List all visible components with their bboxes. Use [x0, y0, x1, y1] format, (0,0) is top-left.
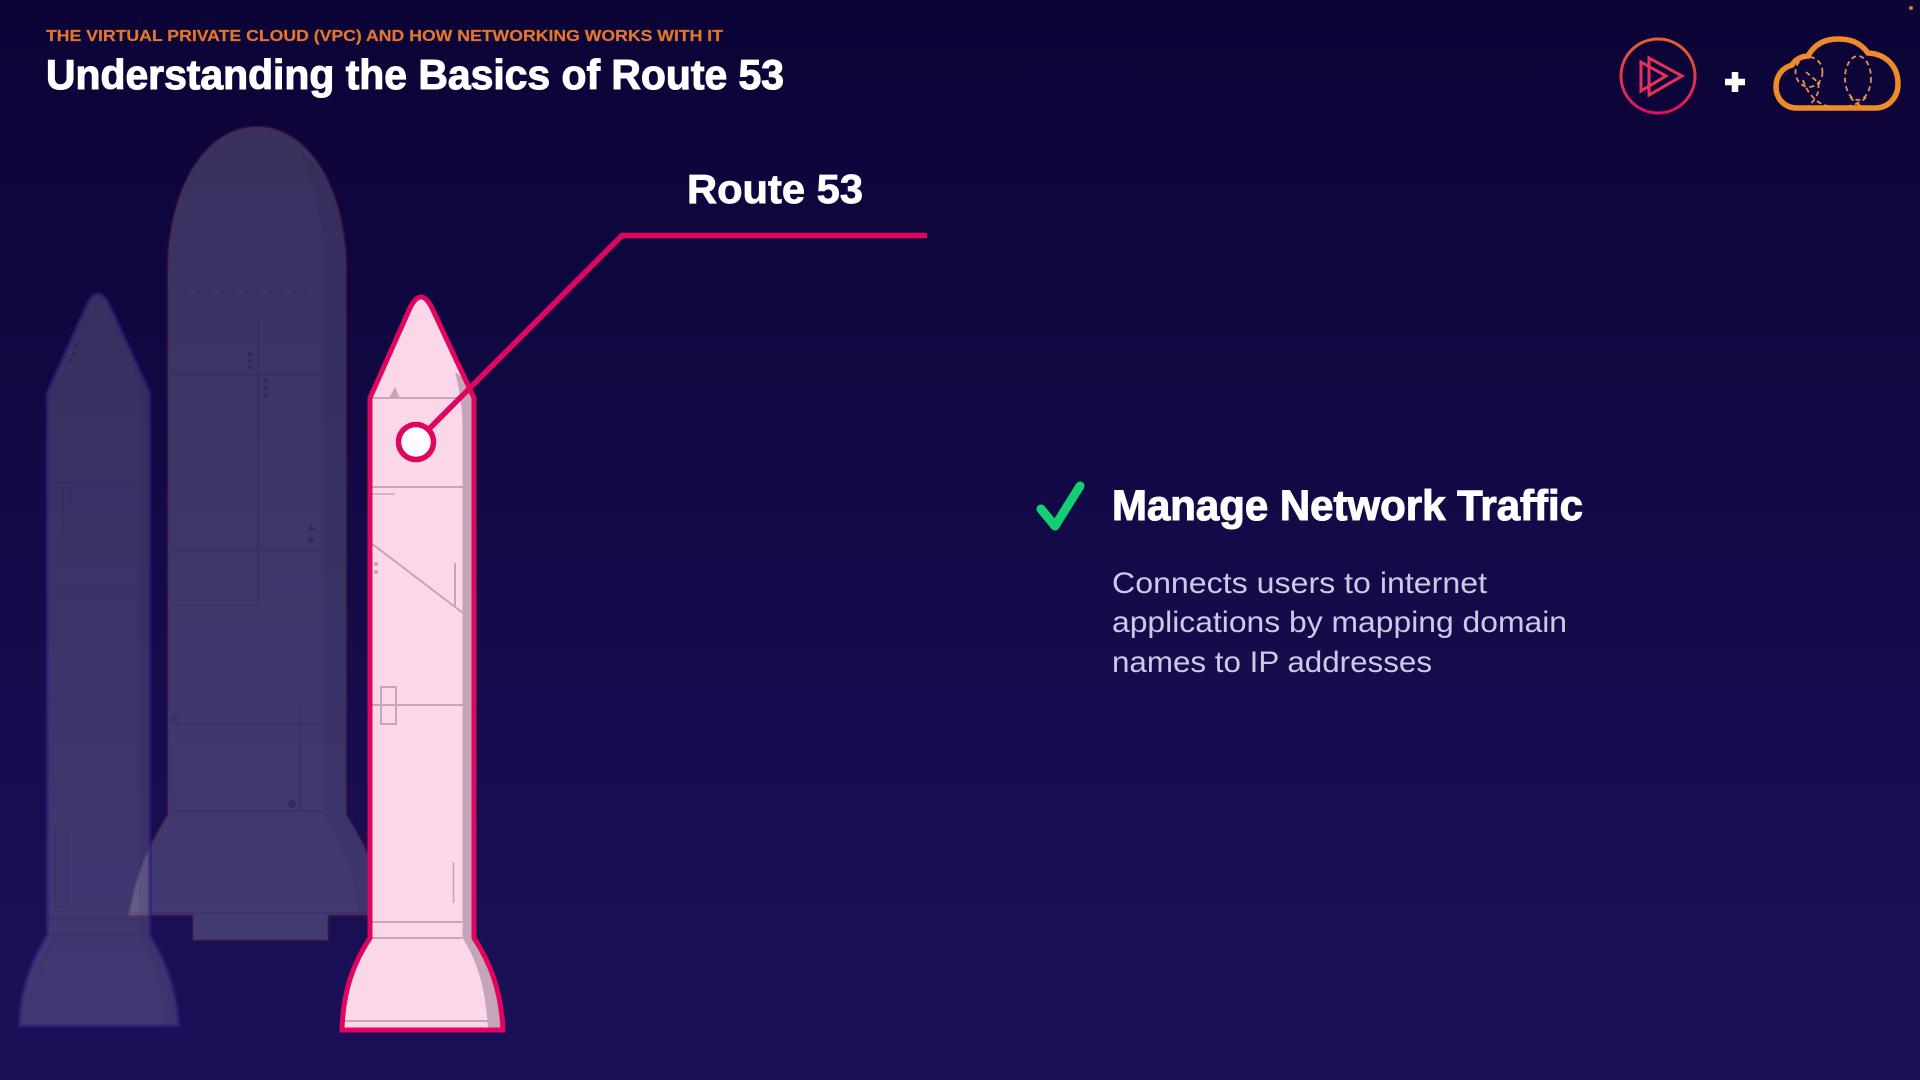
title: Understanding the Basics of Route 53: [46, 51, 784, 98]
icon: cloud with balloons: [1776, 39, 1898, 108]
rocket: small faded left rocket: [19, 294, 179, 1026]
rocket: highlighted pink Route 53 rocket: [342, 297, 503, 1030]
callout label: Route 53: Route 53: [687, 166, 863, 212]
feature description: applications by mapping domain: [1112, 606, 1567, 639]
feature description: [1112, 567, 1567, 679]
feature description: names to IP addresses: [1112, 646, 1432, 679]
plus sign: [1725, 72, 1745, 92]
icon: green check mark: [1041, 486, 1080, 526]
callout line and marker: [398, 236, 927, 460]
rocket: large faded centre rocket: [129, 127, 385, 940]
corner status dot: [1909, 6, 1913, 10]
eyebrow heading: THE VIRTUAL PRIVATE CLOUD (VPC) AND HOW NETWORKING WORKS WITH IT: [46, 28, 723, 45]
icon: play logo: [1621, 39, 1695, 113]
feature heading: Manage Network Traffic: [1112, 482, 1583, 530]
feature description: Connects users to internet: [1112, 567, 1488, 600]
